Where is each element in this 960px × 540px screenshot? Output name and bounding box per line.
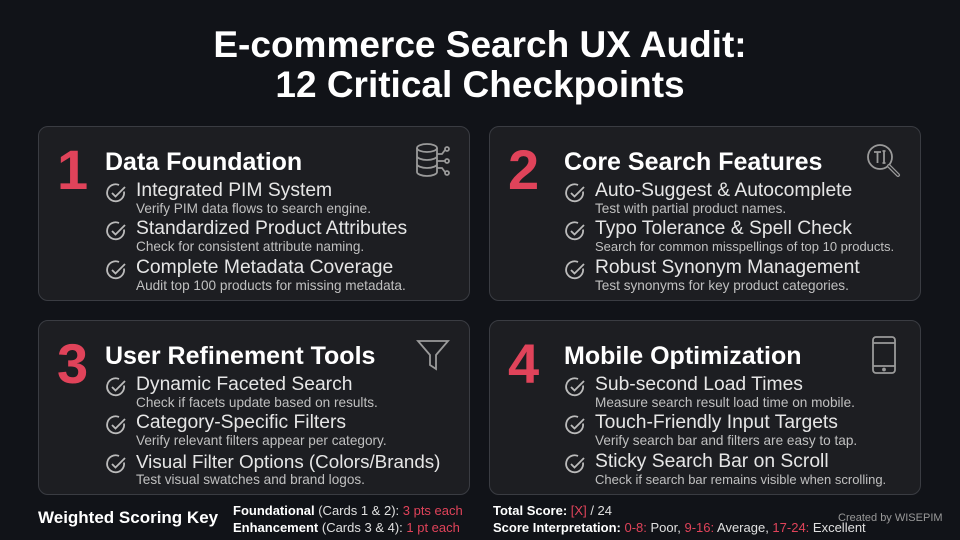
heading: core search features: Core Search Features xyxy=(564,148,822,176)
item xyxy=(565,257,860,293)
item: Test synonyms for key product categories. xyxy=(595,278,849,293)
item: Standardized Product Attributes xyxy=(136,218,407,239)
icon: filter xyxy=(416,340,450,370)
item: Verify relevant filters appear per category. xyxy=(136,433,387,448)
total score and interpretation: Total Score: [X] / 24 xyxy=(493,503,612,518)
number 4: 4 xyxy=(508,332,539,395)
item: Audit top 100 products for missing metadata. xyxy=(136,278,406,293)
item: Check if facets update based on results. xyxy=(136,395,378,410)
item xyxy=(565,412,857,448)
item xyxy=(565,218,894,254)
item: Typo Tolerance & Spell Check xyxy=(595,218,852,239)
item: Sticky Search Bar on Scroll xyxy=(595,451,829,472)
item: Measure search result load time on mobile. xyxy=(595,395,855,410)
title: E-commerce Search UX Audit: xyxy=(213,24,747,65)
panel: mobile optimization xyxy=(489,320,921,495)
number 3: 3 xyxy=(57,332,88,395)
item: Test with partial product names. xyxy=(595,201,786,216)
icon: search text xyxy=(867,144,900,178)
item xyxy=(106,218,407,254)
panel: data foundation xyxy=(38,126,470,301)
item: Integrated PIM System xyxy=(136,180,332,201)
panel: core search features xyxy=(489,126,921,301)
item xyxy=(106,257,406,293)
total score and interpretation xyxy=(493,503,866,535)
item: Visual Filter Options (Colors/Brands) xyxy=(136,451,440,472)
item xyxy=(106,374,378,410)
credit: Created by WISEPIM xyxy=(838,512,943,524)
item: Check for consistent attribute naming. xyxy=(136,239,364,254)
item: Robust Synonym Management xyxy=(595,257,860,278)
item: Dynamic Faceted Search xyxy=(136,374,352,395)
item: Verify PIM data flows to search engine. xyxy=(136,201,371,216)
item xyxy=(106,412,387,448)
item: Touch-Friendly Input Targets xyxy=(595,412,838,433)
icon: database xyxy=(416,143,450,177)
scoring weights: Enhancement (Cards 3 & 4): 1 pt each xyxy=(233,520,460,535)
item: Auto-Suggest & Autocomplete xyxy=(595,180,852,201)
item xyxy=(565,374,855,410)
item: Sub-second Load Times xyxy=(595,374,803,395)
number 2: 2 xyxy=(508,138,539,201)
item: Verify search bar and filters are easy to tap. xyxy=(595,433,857,448)
heading: user refinement tools: User Refinement Tools xyxy=(105,342,375,370)
item: Check if search bar remains visible when scrolling. xyxy=(595,472,886,487)
scoring weights xyxy=(233,503,463,535)
heading: data foundation: Data Foundation xyxy=(105,148,302,176)
total score and interpretation: Score Interpretation: 0-8: Poor, 9-16: Average, 17-24: Excellent xyxy=(493,520,866,535)
number 1: 1 xyxy=(57,138,88,201)
scoring weights: Foundational (Cards 1 & 2): 3 pts each xyxy=(233,503,463,518)
item: Search for common misspellings of top 10 products. xyxy=(595,239,894,254)
heading: mobile optimization: Mobile Optimization xyxy=(564,342,802,370)
icon: phone xyxy=(872,336,896,374)
item xyxy=(106,180,371,216)
item xyxy=(106,451,440,487)
item: Complete Metadata Coverage xyxy=(136,257,393,278)
item: Test visual swatches and brand logos. xyxy=(136,472,365,487)
item: Category-Specific Filters xyxy=(136,412,346,433)
title xyxy=(213,24,747,105)
title: 12 Critical Checkpoints xyxy=(275,64,685,105)
scoring key heading: Weighted Scoring Key xyxy=(38,508,218,527)
item xyxy=(565,451,886,487)
panel: user refinement tools xyxy=(38,320,470,495)
item xyxy=(565,180,852,216)
